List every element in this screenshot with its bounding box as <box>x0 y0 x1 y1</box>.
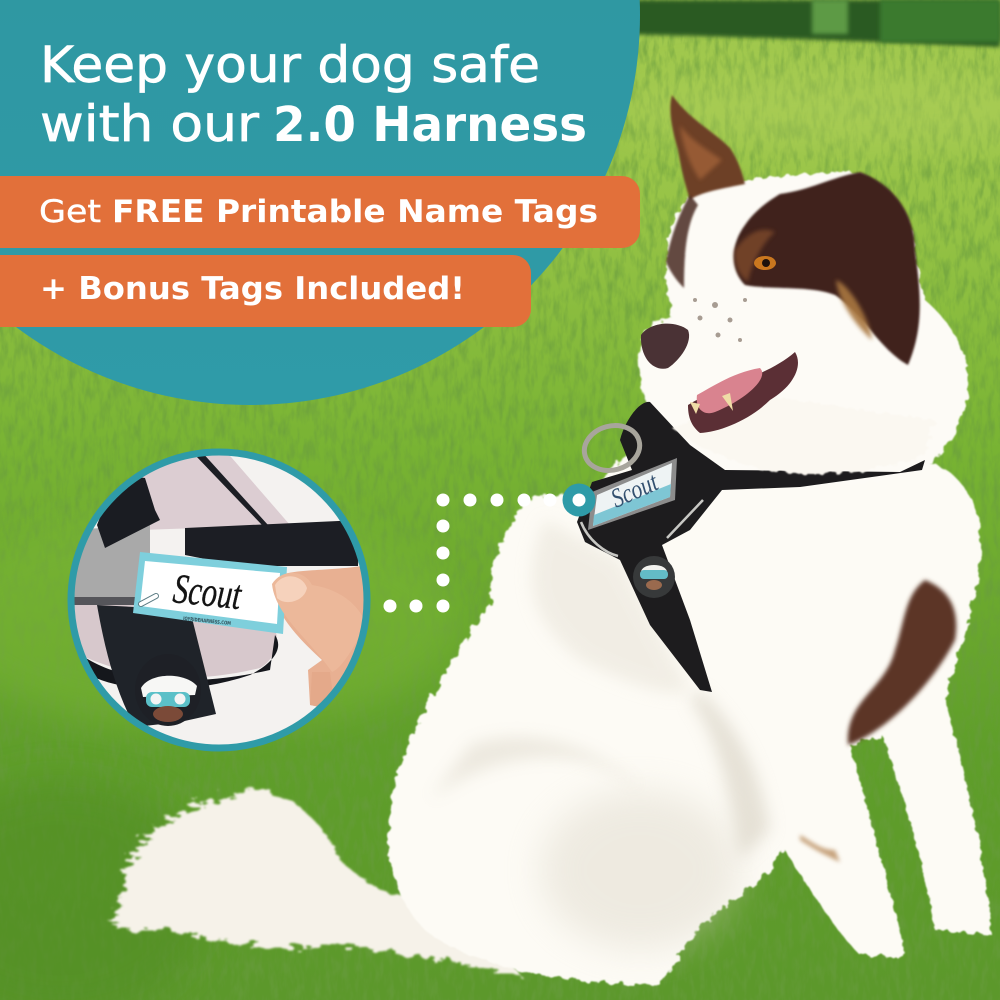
inset thumb overlay <box>272 573 317 706</box>
eye <box>754 256 776 270</box>
inset: name tag close-up <box>68 449 372 751</box>
banner: free name tags: FREE Printable Name Tags <box>112 194 598 230</box>
headline <box>40 36 587 153</box>
headline: with our <box>40 95 259 153</box>
head and ruff <box>639 172 969 485</box>
dog tail <box>112 790 520 975</box>
nose <box>641 324 689 369</box>
inset name tag: JOYRIDEHARNESS.COM <box>182 616 231 627</box>
banner: bonus tags: + Bonus Tags Included! <box>40 271 465 307</box>
harness name tag: Scout <box>606 466 663 513</box>
banner: bonus tags <box>0 255 531 327</box>
banner: free name tags: Get <box>39 194 101 230</box>
bone icon <box>141 596 156 604</box>
connector target marker <box>562 484 596 516</box>
dark left-head edge <box>666 195 698 288</box>
brown flank patch <box>848 580 956 745</box>
dog body <box>389 420 992 985</box>
dog illustration <box>112 95 992 985</box>
muzzle speckles <box>693 298 747 342</box>
teal header circle <box>0 0 640 405</box>
inset name tag <box>133 552 287 634</box>
harness name tag <box>588 458 677 530</box>
inset harness padding <box>70 600 277 678</box>
brown head patch <box>734 172 920 365</box>
harness <box>577 402 925 692</box>
banner: free name tags <box>0 176 640 248</box>
inset pug badge <box>135 654 201 726</box>
mouth <box>688 352 798 433</box>
harness reflective edge <box>581 500 703 556</box>
inset name tag: Scout <box>171 566 244 619</box>
harness badge <box>633 556 675 598</box>
left ear <box>670 95 745 200</box>
dotted connector arrow <box>384 494 556 612</box>
headline: Keep your dog safe <box>40 36 540 94</box>
inset fingers <box>284 566 364 706</box>
ruff fur over harness <box>672 395 935 474</box>
headline: 2.0 Harness <box>273 97 587 153</box>
body shading <box>430 520 840 950</box>
inset black straps <box>97 478 160 548</box>
harness ring <box>579 420 645 476</box>
